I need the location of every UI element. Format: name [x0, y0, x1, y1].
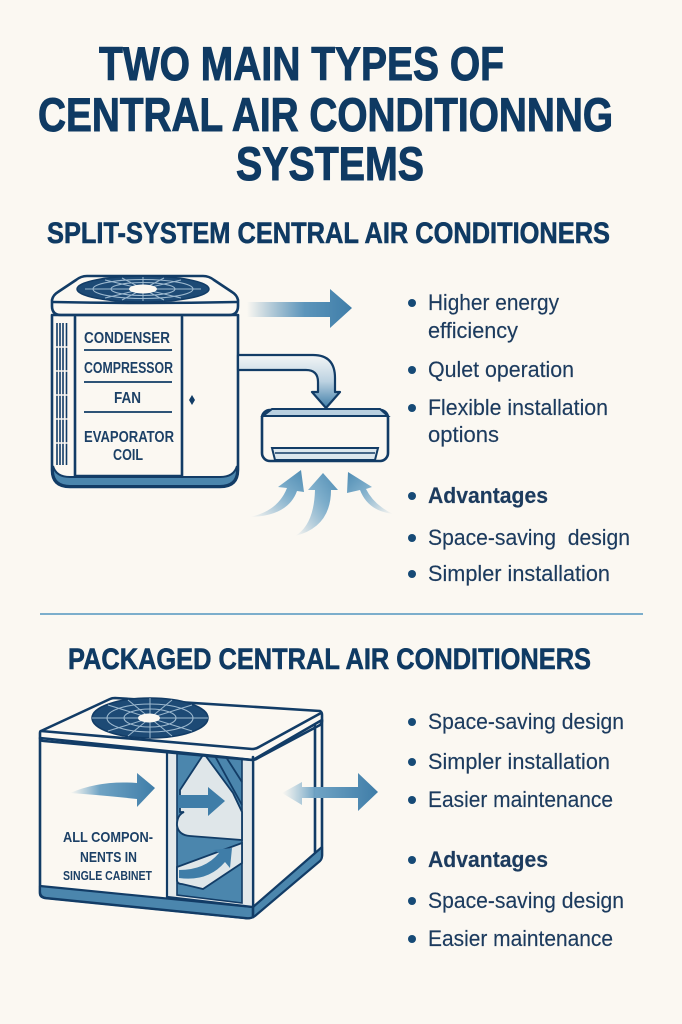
list: packaged benefits: Simpler installation: [428, 749, 610, 774]
list: split-system benefits: [408, 290, 630, 586]
component labels: CONDENSER: [84, 330, 170, 347]
cabinet label: [63, 829, 153, 883]
list: packaged benefits: [408, 709, 624, 951]
title: SYSTEMS: [236, 137, 424, 190]
cabinet body: [52, 315, 238, 487]
list: split-system benefits: options: [428, 422, 499, 447]
arrow: heat outflow: [247, 289, 352, 328]
arrows: return air: [250, 470, 393, 536]
list: split-system benefits: Flexible installation: [428, 395, 608, 420]
side louvre grille: [56, 323, 68, 465]
lid: [52, 276, 238, 315]
interior cutaway: [167, 752, 253, 907]
fan grille: [77, 276, 209, 302]
component labels: COMPRESSOR: [84, 360, 173, 377]
illustration: outdoor condenser unit: [52, 276, 238, 487]
component labels: [84, 330, 174, 464]
cabinet faces: [40, 720, 322, 918]
list: split-system benefits: Simpler installation: [428, 561, 610, 586]
cabinet label: NENTS IN: [80, 849, 137, 866]
fan grille: [92, 698, 208, 738]
arrow: double-headed airflow: [282, 773, 378, 811]
cabinet label: ALL COMPON-: [63, 829, 153, 846]
list: split-system benefits: efficiency: [428, 318, 518, 343]
cabinet label: SINGLE CABINET: [63, 868, 152, 883]
base band: [53, 466, 237, 486]
list: packaged benefits: Space-saving design: [428, 709, 624, 734]
list: split-system benefits: Advantages: [428, 483, 548, 508]
heading: packaged: PACKAGED CENTRAL AIR CONDITIONERS: [68, 643, 591, 676]
arrow: airflow in: [70, 773, 155, 807]
list: packaged benefits: Space-saving design: [428, 888, 624, 913]
component labels: COIL: [113, 447, 143, 464]
component labels: FAN: [114, 390, 141, 407]
title: TWO MAIN TYPES OF: [99, 37, 504, 90]
list: packaged benefits: Easier maintenance: [428, 926, 613, 951]
list: packaged benefits: Easier maintenance: [428, 787, 613, 812]
illustration: indoor unit: [262, 409, 388, 461]
illustration: packaged unit: [40, 698, 322, 918]
list: split-system benefits: Space-saving design: [428, 525, 630, 550]
service panel: [75, 317, 182, 476]
arrow: duct to indoor unit: [238, 355, 340, 408]
list: split-system benefits: Higher energy: [428, 290, 559, 315]
base band: [40, 847, 322, 918]
lid: [40, 698, 322, 760]
handle: [189, 395, 195, 405]
list: split-system benefits: Qulet operation: [428, 357, 574, 382]
title: [38, 37, 613, 190]
component labels: EVAPORATOR: [84, 429, 174, 446]
list: packaged benefits: Advantages: [428, 847, 548, 872]
